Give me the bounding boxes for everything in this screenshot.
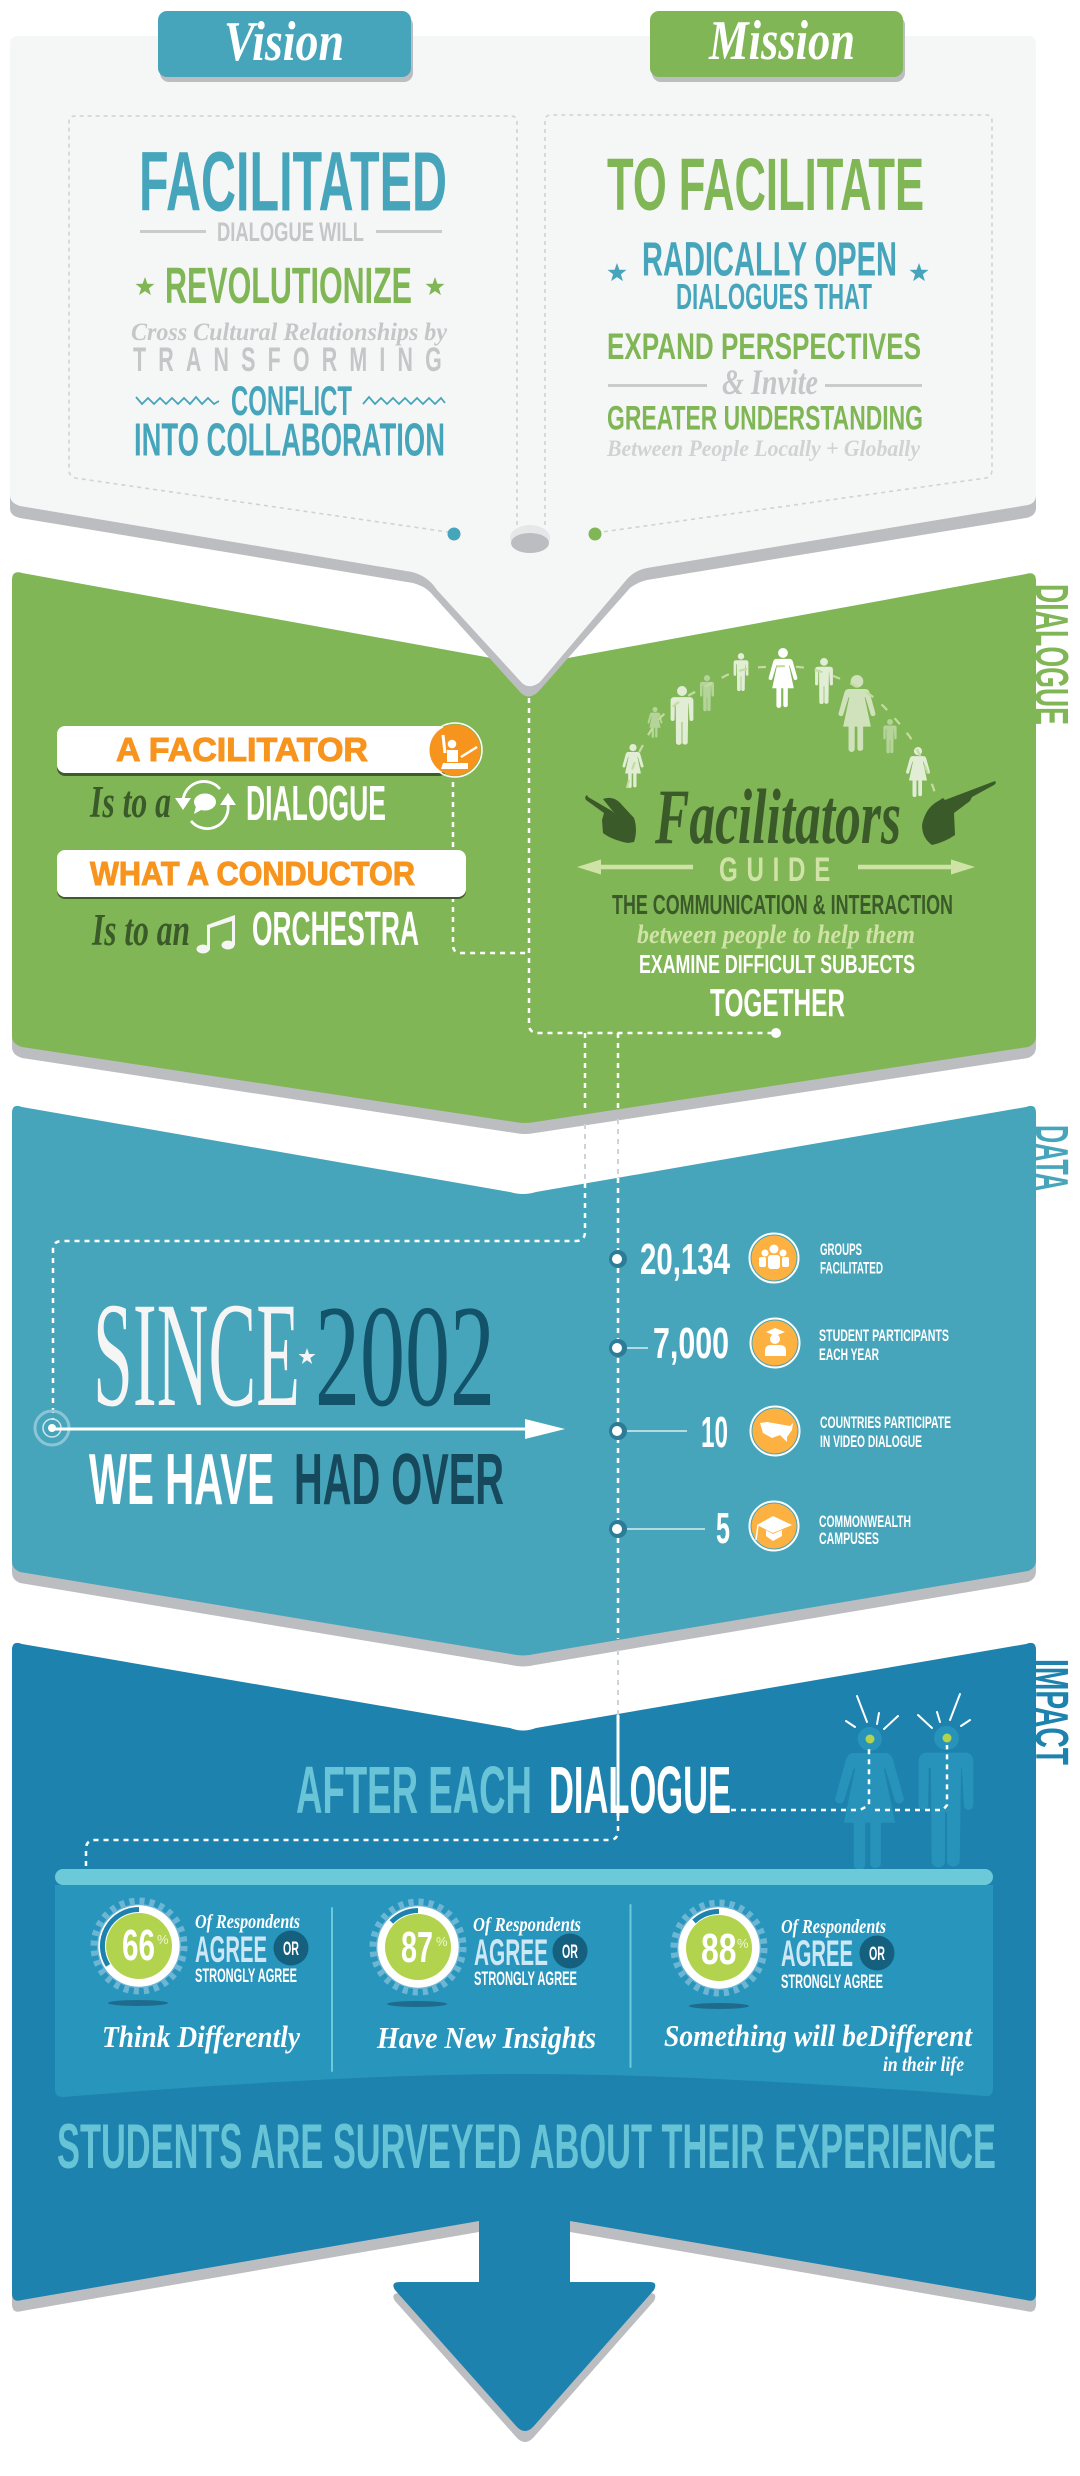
- text: is to an orchestra: Is to an: [91, 905, 190, 955]
- side label: impact: IMPACT: [1026, 1659, 1078, 1765]
- mission text block: GREATER UNDERSTANDING: [607, 400, 923, 438]
- heading: facilitators: Facilitators: [654, 773, 901, 860]
- mission text block: RADICALLY OPEN: [642, 232, 897, 286]
- text block: guide: GUIDE: [719, 851, 830, 889]
- tab: vision: [158, 11, 413, 82]
- tab: mission: Mission: [708, 10, 855, 72]
- text: is to a dialogue: DIALOGUE: [246, 777, 386, 831]
- stat: 5 commonwealth campuses: COMMONWEALTH: [819, 1512, 911, 1531]
- result: 66 percent think differently: Think Differently: [102, 2019, 300, 2054]
- dashed frame: mission: [545, 115, 992, 532]
- label bar: a facilitator: A FACILITATOR: [116, 732, 368, 769]
- stat: 10 countries participate: COUNTRIES PARTICIPATE: [820, 1413, 951, 1432]
- result: 87 percent new insights: 87: [401, 1923, 433, 1972]
- result: 66 percent think differently: OR: [283, 1939, 299, 1960]
- text block: guide: EXAMINE DIFFICULT SUBJECTS: [639, 949, 915, 979]
- text: is to a dialogue: [89, 777, 386, 831]
- stat: 10 countries participate: 10: [701, 1408, 728, 1457]
- dashed connectors into people and survey panel: [86, 1715, 947, 1866]
- stat: 10 countries participate: IN VIDEO DIALOGUE: [820, 1432, 922, 1451]
- result: 88 percent something different: [664, 1904, 973, 2076]
- connector dots and hole: [448, 525, 602, 553]
- label bar: a facilitator: [57, 726, 447, 776]
- panel: data background: [12, 1106, 1036, 1666]
- text: is to an orchestra: ORCHESTRA: [252, 903, 419, 956]
- vision text block: CONFLICT: [231, 377, 352, 424]
- icon: left conducting hand: [585, 795, 636, 843]
- tab: vision: Vision: [224, 11, 344, 73]
- result: 87 percent new insights: STRONGLY AGREE: [474, 1969, 577, 1990]
- vision text block: TRANSFORMING: [133, 341, 442, 379]
- panel: vision and mission background: [10, 36, 1036, 696]
- dashed connectors through panels: [53, 698, 776, 1715]
- stat: 20,134 groups facilitated: FACILITATED: [820, 1258, 883, 1278]
- mission text block: [606, 143, 928, 461]
- text: is to a dialogue: Is to a: [89, 777, 171, 827]
- result: 88 percent something different: STRONGLY AGREE: [781, 1972, 883, 1993]
- stat: 5 commonwealth campuses: 5: [716, 1504, 730, 1553]
- stat: 20,134 groups facilitated: GROUPS: [820, 1240, 862, 1259]
- vision text block: DIALOGUE WILL: [217, 217, 364, 247]
- result: 88 percent something different: Of Respondents: [781, 1916, 886, 1938]
- result: 88 percent something different: OR: [869, 1944, 885, 1965]
- result: 87 percent new insights: AGREE: [474, 1931, 548, 1973]
- text block: guide: [577, 851, 975, 1038]
- vision text block: [131, 134, 448, 466]
- side label: dialogue: DIALOGUE: [1026, 584, 1078, 725]
- illustration: two people with sparks: [835, 1694, 973, 1870]
- icon: right hand with baton: [922, 781, 996, 845]
- panel: survey results: [55, 1869, 993, 2097]
- result: 66 percent think differently: AGREE: [195, 1928, 267, 1970]
- heading: after each dialogue: AFTER EACH: [296, 1753, 532, 1828]
- result: 66 percent think differently: Of Respondents: [195, 1911, 300, 1933]
- result: 88 percent something different: in their life: [883, 2052, 964, 2076]
- icon: conductor in orange circle: [428, 723, 482, 777]
- label bar: what a conductor: [57, 850, 466, 899]
- stat: 7,000 student participants: STUDENT PARTICIPANTS: [819, 1326, 949, 1345]
- heading: we have had over: HAD OVER: [294, 1440, 504, 1520]
- panel: impact background with down arrow: [12, 1643, 1036, 2442]
- heading: we have had over: WE HAVE: [89, 1440, 274, 1520]
- result: 87 percent new insights: %: [436, 1934, 448, 1949]
- result: 88 percent something different: 88: [701, 1925, 736, 1974]
- heading: since 2002: SINCE: [93, 1272, 300, 1438]
- stat: 20,134 groups facilitated: 20,134: [640, 1235, 730, 1284]
- text block: guide: between people to help them: [637, 920, 915, 949]
- heading: after each dialogue: DIALOGUE: [549, 1753, 731, 1828]
- stat: 7,000 student participants: 7,000: [653, 1319, 729, 1368]
- result: 66 percent think differently: 66: [122, 1921, 155, 1970]
- result: 87 percent new insights: OR: [562, 1942, 578, 1963]
- result: 66 percent think differently: %: [157, 1932, 169, 1947]
- text: is to an orchestra: [91, 903, 419, 956]
- dashed frame: vision: [69, 116, 517, 532]
- result: 66 percent think differently: STRONGLY AGREE: [195, 1966, 297, 1987]
- stat: 7,000 student participants: [609, 1318, 949, 1368]
- mission text block: DIALOGUES THAT: [676, 276, 872, 317]
- result: 88 percent something different: Something will beDifferent: [664, 2018, 973, 2053]
- stat: 5 commonwealth campuses: CAMPUSES: [819, 1529, 879, 1548]
- label bar: what a conductor: WHAT A CONDUCTOR: [90, 856, 415, 893]
- text block: guide: TOGETHER: [710, 982, 845, 1025]
- vision text block: INTO COLLABORATION: [134, 414, 445, 466]
- vision text block: REVOLUTIONIZE: [165, 257, 412, 314]
- mission text block: EXPAND PERSPECTIVES: [607, 325, 921, 367]
- panel: dialogue background: [12, 572, 1036, 1134]
- result: 87 percent new insights: Of Respondents: [473, 1914, 581, 1936]
- result: 66 percent think differently: [95, 1902, 308, 2054]
- heading: since 2002: 2002: [315, 1275, 495, 1437]
- stat: 20,134 groups facilitated: [609, 1234, 883, 1284]
- tab: mission: [650, 10, 905, 82]
- vision text block: Cross Cultural Relationships by: [131, 319, 448, 346]
- stat: 10 countries participate: [609, 1406, 951, 1457]
- vision text block: FACILITATED: [139, 134, 447, 228]
- stat: 5 commonwealth campuses: [609, 1502, 911, 1553]
- result: 88 percent something different: %: [737, 1936, 749, 1951]
- illustration: arc of people: [622, 648, 935, 797]
- side label: data: DATA: [1026, 1125, 1078, 1191]
- mission text block: Between People Locally + Globally: [606, 436, 921, 461]
- result: 88 percent something different: AGREE: [781, 1932, 853, 1974]
- timeline arrow with target: [35, 1411, 565, 1445]
- result: 87 percent new insights: Have New Insights: [376, 2020, 596, 2055]
- stat: 7,000 student participants: EACH YEAR: [819, 1345, 879, 1364]
- result: 87 percent new insights: [374, 1903, 596, 2055]
- mission text block: & Invite: [722, 362, 818, 402]
